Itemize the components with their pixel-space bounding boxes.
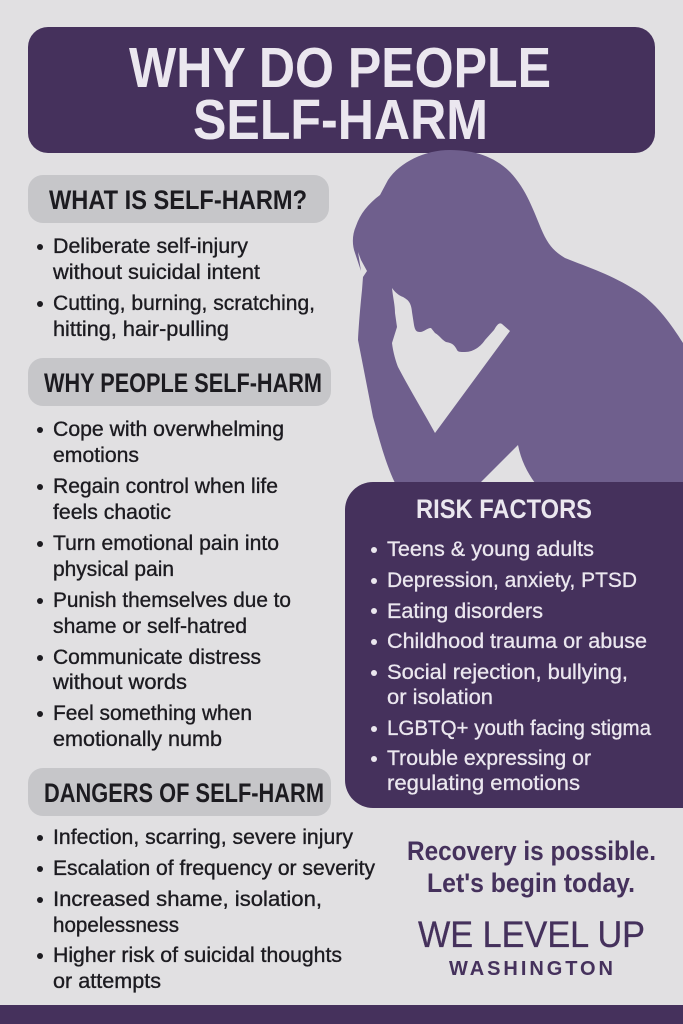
- callout: recovery message: [407, 836, 656, 898]
- list: risk factors: Teens & young adults: [387, 538, 594, 561]
- list: dangers of self-harm: or attempts: [53, 970, 161, 993]
- logo: we level up washington: WASHINGTON: [449, 958, 613, 980]
- list: why people self-harm: emotions: [53, 444, 139, 467]
- list: risk factors: regulating emotions: [387, 772, 580, 795]
- callout: recovery message: Recovery is possible.: [407, 836, 656, 866]
- list: risk factors: LGBTQ+ youth facing stigma: [387, 717, 651, 740]
- list: dangers of self-harm: Increased shame, isolation,: [53, 888, 322, 911]
- list: why people self-harm: Punish themselves due to: [53, 589, 291, 612]
- icon: silhouette of a person with head in hand: [353, 150, 683, 483]
- list: what is self-harm: [37, 235, 315, 341]
- list: why people self-harm: Regain control when life: [53, 475, 278, 498]
- list: why people self-harm: Cope with overwhelming: [53, 418, 284, 441]
- callout: recovery message: Let's begin today.: [427, 868, 635, 898]
- footer bar: [0, 1005, 683, 1024]
- list: why people self-harm: Communicate distress: [53, 646, 261, 669]
- section heading: why people self-harm: [28, 358, 331, 406]
- title banner: WHY DO PEOPLE: [129, 36, 551, 100]
- panel: risk factors: [345, 482, 683, 808]
- list: why people self-harm: feels chaotic: [53, 501, 171, 524]
- list: risk factors: [371, 538, 651, 795]
- list: what is self-harm: Deliberate self-injury: [53, 235, 248, 258]
- list: risk factors: Eating disorders: [387, 600, 543, 623]
- list: dangers of self-harm: Escalation of frequency or severity: [53, 857, 375, 880]
- section heading: dangers of self-harm: DANGERS OF SELF-HARM: [44, 778, 324, 808]
- logo: we level up washington: WE LEVEL UP: [418, 914, 645, 955]
- list: what is self-harm: Cutting, burning, scratching,: [53, 292, 315, 315]
- list: why people self-harm: Feel something when: [53, 702, 252, 725]
- section heading: what is self-harm: WHAT IS SELF-HARM?: [49, 185, 307, 215]
- logo: we level up washington: [418, 914, 645, 980]
- list: dangers of self-harm: Higher risk of suicidal thoughts: [53, 944, 342, 967]
- list: risk factors: Social rejection, bullying,: [387, 661, 628, 684]
- list: risk factors: Childhood trauma or abuse: [387, 630, 647, 653]
- list: why people self-harm: without words: [52, 671, 187, 694]
- section heading: what is self-harm: [28, 175, 329, 223]
- list: why people self-harm: [37, 418, 291, 751]
- list: dangers of self-harm: Infection, scarring, severe injury: [53, 826, 353, 849]
- heading: risk factors: RISK FACTORS: [416, 494, 592, 524]
- title banner: [28, 27, 655, 153]
- list: what is self-harm: hitting, hair-pulling: [53, 318, 229, 341]
- list: why people self-harm: emotionally numb: [53, 728, 222, 751]
- list: what is self-harm: without suicidal intent: [52, 261, 260, 284]
- list: why people self-harm: Turn emotional pain into: [53, 532, 279, 555]
- section heading: dangers of self-harm: [28, 768, 331, 816]
- list: why people self-harm: physical pain: [53, 558, 174, 581]
- section heading: why people self-harm: WHY PEOPLE SELF-HARM: [44, 368, 322, 398]
- list: why people self-harm: shame or self-hatred: [53, 615, 247, 638]
- list: risk factors: Trouble expressing or: [387, 747, 591, 770]
- list: risk factors: or isolation: [387, 686, 493, 709]
- list: dangers of self-harm: hopelessness: [53, 914, 179, 937]
- title banner: SELF-HARM: [193, 88, 488, 152]
- list: risk factors: Depression, anxiety, PTSD: [387, 569, 637, 592]
- list: dangers of self-harm: [37, 826, 375, 993]
